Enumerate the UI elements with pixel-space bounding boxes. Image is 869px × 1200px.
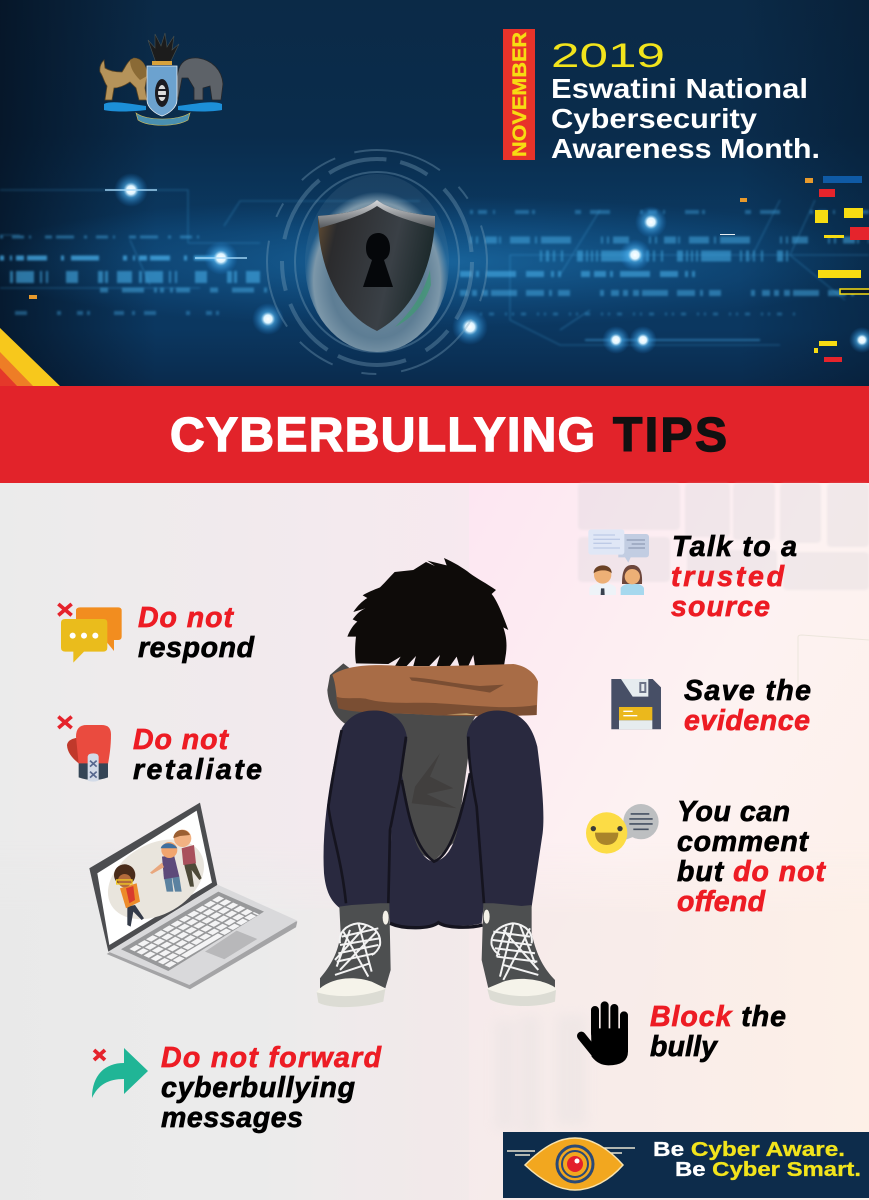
footer banner: be cyber aware: Be Cyber Smart. <box>675 1159 861 1181</box>
tip: do not retaliate: retaliate <box>133 754 262 786</box>
tip: block the bully: bully <box>650 1031 719 1063</box>
tip: do not retaliate <box>58 717 262 786</box>
tip: do not forward: Do not forward <box>161 1042 382 1074</box>
tip: talk to a trusted source: Talk to a <box>672 531 797 563</box>
shield emblem <box>267 150 487 374</box>
bully front <box>163 873 182 892</box>
arms <box>332 664 538 716</box>
tip: do not respond: Do not <box>138 602 234 634</box>
tip: save the evidence <box>611 675 811 737</box>
footer banner: be cyber aware <box>503 1132 869 1198</box>
icon: stop hand <box>581 1005 628 1065</box>
title banner <box>0 386 869 483</box>
body background <box>312 482 869 1200</box>
tip: do not retaliate: Do not <box>133 724 230 756</box>
lion <box>100 58 147 100</box>
footer banner: be cyber aware: Be Cyber Aware. <box>653 1139 845 1161</box>
tip: do not forward: messages <box>161 1102 303 1134</box>
tip: comment but do not offend <box>586 796 826 918</box>
tip: do not forward: cyberbullying <box>161 1072 355 1104</box>
corner stripes <box>0 328 61 387</box>
icon: smiling face with speech bubble <box>586 804 659 854</box>
illustration: sad boy sitting <box>317 558 556 1007</box>
tip: comment but do not offend: You can <box>677 796 790 828</box>
rings <box>267 150 487 374</box>
tip: comment but do not offend: but do not <box>677 856 826 888</box>
heading: campaign title: Eswatini National <box>551 73 808 104</box>
heading: campaign title: Cybersecurity <box>551 103 758 134</box>
illustration: laptop with bullying scene <box>89 803 297 989</box>
right shoe <box>482 903 556 1006</box>
badge: November: NOVEMBER <box>510 32 531 157</box>
left shoe <box>317 903 391 1007</box>
tip: comment but do not offend: comment <box>677 826 810 858</box>
badge: November <box>503 29 535 160</box>
tip: block the bully: Block the <box>650 1001 786 1033</box>
heading: campaign title <box>551 37 820 164</box>
tip: block the bully <box>581 1001 786 1065</box>
heading: campaign title: 2019 <box>551 37 665 75</box>
icon: cyber eye <box>507 1138 635 1190</box>
ribbon <box>104 102 222 112</box>
icon: floppy disk <box>611 679 661 729</box>
tip: save the evidence: Save the <box>684 675 811 707</box>
glow lights <box>105 173 869 354</box>
keyhole <box>363 233 393 287</box>
sweater <box>327 663 480 862</box>
icon: two people talking <box>588 529 649 595</box>
header panel: cyber background <box>0 0 869 387</box>
coat of arms <box>100 33 223 125</box>
heading: campaign title: Awareness Month. <box>551 133 820 164</box>
tip: do not respond: respond <box>138 632 255 664</box>
shield <box>147 66 177 116</box>
icon: chat bubbles <box>58 604 122 663</box>
bullied child <box>127 905 144 927</box>
coloured data blocks <box>29 176 869 362</box>
tip: save the evidence: evidence <box>684 705 810 737</box>
icon: boxing glove <box>58 717 111 782</box>
plumes <box>148 33 179 63</box>
tip: talk to a trusted source: source <box>671 591 770 623</box>
icon: forward arrow <box>92 1048 148 1098</box>
elephant <box>175 58 223 100</box>
title banner: CYBERBULLYING <box>170 409 595 462</box>
tip: talk to a trusted source <box>588 529 797 623</box>
hair <box>347 558 508 666</box>
tip: comment but do not offend: offend <box>677 886 766 918</box>
tip: do not forward <box>92 1042 382 1134</box>
legs <box>388 773 484 927</box>
tip: do not respond <box>58 602 255 664</box>
title banner: TIPS <box>613 409 727 462</box>
tip: talk to a trusted source: trusted <box>671 561 785 593</box>
bully back <box>183 860 202 887</box>
